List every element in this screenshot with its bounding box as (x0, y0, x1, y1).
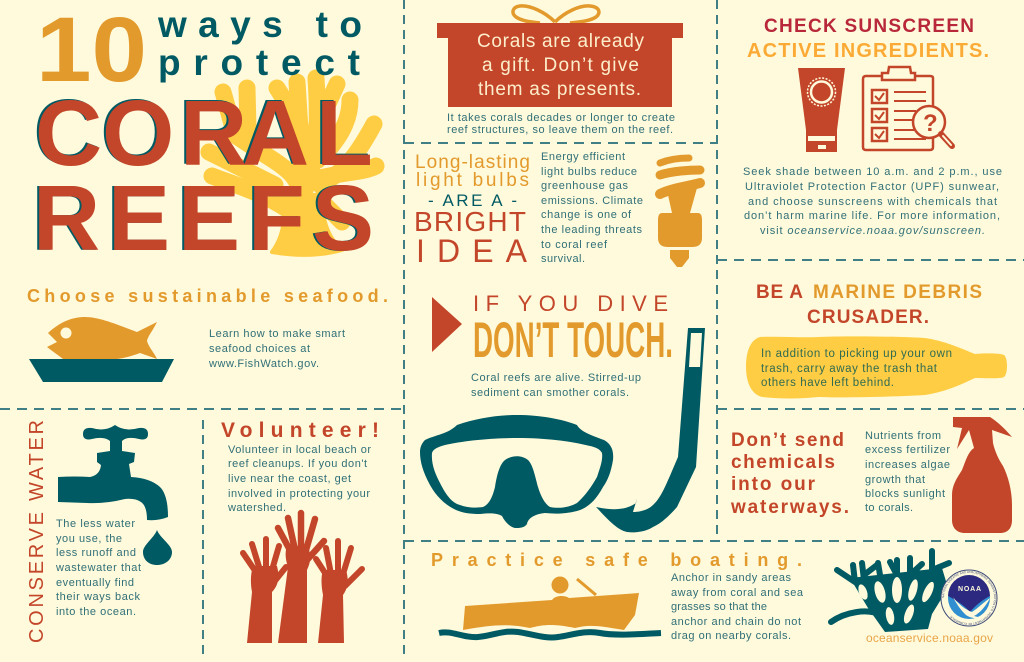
text (743, 166, 1002, 237)
text: into the ocean. (56, 606, 136, 618)
title (31, 0, 374, 270)
icon: fish on plate (29, 317, 174, 382)
text: www.FishWatch.gov. (208, 358, 319, 370)
panel: dive (420, 291, 705, 532)
text: sediment can smother corals. (471, 387, 629, 399)
text: watershed. (227, 502, 286, 514)
text (865, 430, 950, 514)
text: their ways back (56, 591, 140, 603)
text: survival. (541, 253, 585, 265)
panel: volunteer (221, 419, 379, 643)
text: others have left behind. (761, 377, 894, 389)
text: light bulbs reduce (541, 166, 637, 178)
text: grasses so that the (671, 601, 767, 613)
text: change is one of (541, 209, 632, 221)
icon: light bulb (658, 158, 702, 267)
text (55, 518, 141, 618)
heading: Don’t send (731, 430, 844, 451)
heading: - ARE A - (428, 191, 517, 210)
title REEFS: REEFS (31, 166, 372, 270)
text: the leading threats (541, 224, 642, 236)
heading: Volunteer! (221, 419, 379, 442)
text: excess fertilizer (865, 444, 950, 456)
icon: raised hands (243, 513, 362, 643)
title line ways to: ways to (157, 4, 362, 45)
text (671, 572, 804, 642)
text: visit oceanservice.noaa.gov/sunscreen. (760, 225, 985, 237)
text: reef cleanups. If you don't (228, 458, 367, 470)
icon: plastic bottle (746, 336, 1007, 398)
icon: arrow (432, 297, 462, 352)
gift text: Corals are already (477, 31, 644, 52)
caption (447, 112, 675, 136)
text (471, 372, 641, 399)
caption: reef structures, so leave them on the reef. (447, 124, 673, 136)
title REEFS: REEFS (33, 166, 374, 270)
text (541, 151, 643, 265)
text: live near the coast, get (228, 473, 351, 485)
heading: BRIGHT (414, 206, 526, 237)
title CORAL: CORAL (35, 81, 373, 185)
heading: chemicals (731, 452, 835, 473)
gift text: a gift. Don’t give (482, 55, 639, 76)
icon: snorkel (596, 328, 705, 532)
text: to corals. (865, 502, 913, 514)
heading: Practice safe boating. (431, 550, 802, 570)
text: seafood choices at (209, 343, 310, 355)
heading (730, 430, 849, 518)
panel: marine debris (746, 282, 1007, 398)
gift text (477, 31, 644, 100)
title number 10: 10 (36, 0, 147, 101)
icon: water drop (143, 530, 172, 565)
text: Seek shade between 10 a.m. and 2 p.m., use (743, 166, 1002, 178)
logo: NOAA seal: NATIONAL OCEANIC AND ATMOSPHERIC ADMINISTRATION U.S. DEPARTMENT OF COMMERCE (942, 570, 996, 625)
icon: sunscreen tube (798, 68, 845, 152)
text: Volunteer in local beach or (228, 444, 371, 456)
panel: light bulbs (414, 151, 702, 269)
caption: It takes corals decades or longer to create (447, 112, 675, 124)
text: Learn how to make smart (209, 328, 345, 340)
text: involved in protecting your (228, 488, 370, 500)
icon: boat (439, 576, 661, 637)
text: increases algae (865, 459, 950, 471)
icon: spray bottle (952, 417, 1012, 533)
coral illustration behind title (209, 78, 376, 255)
panel: conserve water (26, 420, 172, 643)
icon: gift bow (513, 6, 599, 23)
title CORAL: CORAL (33, 80, 371, 184)
text: Nutrients from (865, 430, 941, 442)
heading: into our (731, 474, 816, 495)
text: Coral reefs are alive. Stirred-up (471, 372, 641, 384)
text: blocks sunlight (865, 488, 945, 500)
text: growth that (865, 474, 925, 486)
title line protect: protect (158, 42, 360, 83)
heading: IF YOU DIVE (473, 291, 668, 316)
text: don’t harm marine life. For more information, (744, 210, 1000, 222)
text (227, 444, 371, 514)
text: anchor and chain do not (671, 616, 801, 628)
text (761, 348, 952, 389)
heading: light bulbs (416, 170, 529, 191)
panel: sunscreen (743, 16, 1002, 237)
icon: mask (420, 415, 613, 528)
text: greenhouse gas (541, 180, 628, 192)
text: The less water (56, 518, 135, 530)
text: you use, the (56, 533, 122, 545)
text: drag on nearby corals. (671, 630, 791, 642)
panel: chemicals (730, 417, 1012, 533)
gift box (437, 23, 683, 107)
text: Energy efficient (541, 151, 625, 163)
heading (414, 152, 530, 269)
heading: waterways. (730, 497, 849, 518)
heading: DON’T TOUCH. (473, 312, 673, 368)
text: emissions. Climate (541, 195, 643, 207)
heading: CRUSADER. (807, 307, 929, 328)
logo: teal coral (831, 551, 949, 632)
logo: NOAA seal: NOAA (958, 586, 981, 593)
heading: IDEA (416, 233, 528, 269)
icon: faucet (58, 425, 168, 520)
text: and choose sunscreens with chemicals that (748, 196, 997, 208)
logo url: oceanservice.noaa.gov (866, 631, 993, 645)
panel: coral gift (437, 6, 683, 136)
heading rotated: CONSERVE WATER (26, 420, 48, 643)
text: to coral reef (541, 239, 608, 251)
text: wastewater that (55, 562, 141, 574)
text: Ultraviolet Protection Factor (UPF) sunwear, (745, 181, 999, 193)
icon: clipboard with magnifier (863, 67, 952, 150)
heading: CHECK SUNSCREEN (764, 16, 974, 37)
gift text: them as presents. (478, 79, 641, 100)
text: trash, carry away the trash that (761, 363, 938, 375)
icon: clipboard with magnifier: ? (923, 110, 938, 137)
heading: BE A (756, 282, 803, 303)
text: In addition to picking up your own (761, 348, 952, 360)
heading: Long-lasting (415, 152, 530, 173)
heading: ACTIVE INGREDIENTS. (747, 40, 989, 62)
text: away from coral and sea (671, 587, 804, 599)
text: Anchor in sandy areas (671, 572, 792, 584)
text (208, 328, 345, 370)
panel: safe boating (431, 550, 804, 642)
panel: sustainable seafood (27, 286, 388, 382)
heading: Choose sustainable seafood. (27, 286, 388, 306)
heading (756, 282, 982, 328)
text: eventually find (56, 577, 134, 589)
text: less runoff and (56, 547, 136, 559)
heading: MARINE DEBRIS (813, 282, 982, 303)
